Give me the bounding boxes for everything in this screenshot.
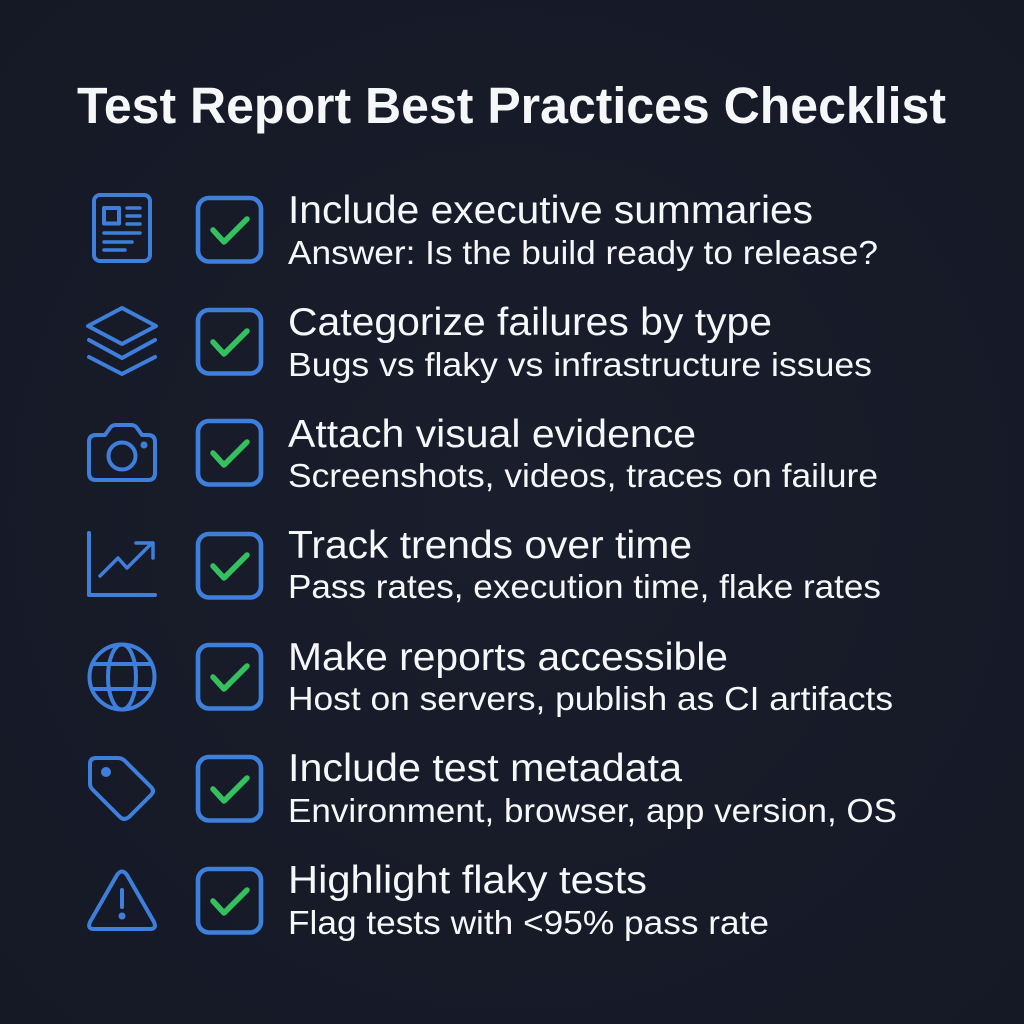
icon: camera xyxy=(89,425,155,480)
icon: tag xyxy=(90,758,153,819)
item text: Environment, browser, app version, OS xyxy=(288,793,897,830)
row 6: metadata xyxy=(90,747,897,830)
checkbox xyxy=(198,757,261,820)
item text: Include executive summaries xyxy=(288,189,813,232)
item text: Attach visual evidence xyxy=(288,413,696,456)
item text: Pass rates, execution time, flake rates xyxy=(288,569,881,606)
checkbox xyxy=(198,421,261,484)
item text: Track trends over time xyxy=(288,524,692,567)
item text: Screenshots, videos, traces on failure xyxy=(288,458,878,495)
row 3: visual evidence xyxy=(89,413,878,495)
row 2: categorize failures xyxy=(88,301,872,384)
item text xyxy=(288,189,878,272)
row 4: trends xyxy=(89,524,881,606)
item text: Flag tests with <95% pass rate xyxy=(288,905,769,942)
checkbox xyxy=(198,869,261,932)
title: Test Report Best Practices Checklist xyxy=(77,77,946,134)
row 7: flaky tests xyxy=(89,859,769,942)
item text: Make reports accessible xyxy=(288,636,728,679)
item text xyxy=(288,413,878,495)
item text: Answer: Is the build ready to release? xyxy=(288,235,878,272)
item text xyxy=(288,859,769,942)
item text: Bugs vs flaky vs infrastructure issues xyxy=(288,347,872,384)
checkbox xyxy=(198,645,261,708)
icon: layers xyxy=(88,308,156,374)
item text: Host on servers, publish as CI artifacts xyxy=(288,681,893,718)
item text xyxy=(288,301,872,384)
row 5: accessible xyxy=(90,636,893,718)
checkbox xyxy=(198,534,261,598)
icon: warning xyxy=(89,872,155,929)
row 1: executive summaries xyxy=(94,189,878,272)
item text: Categorize failures by type xyxy=(288,301,772,344)
checkbox xyxy=(198,198,261,262)
item text: Include test metadata xyxy=(288,747,682,790)
icon: globe xyxy=(90,644,154,710)
item text xyxy=(288,524,881,606)
icon: trend chart xyxy=(89,533,155,595)
icon: document xyxy=(94,195,150,261)
item text: Highlight flaky tests xyxy=(288,859,647,902)
item text xyxy=(288,747,897,830)
checkbox xyxy=(198,310,261,374)
item text xyxy=(288,636,893,718)
